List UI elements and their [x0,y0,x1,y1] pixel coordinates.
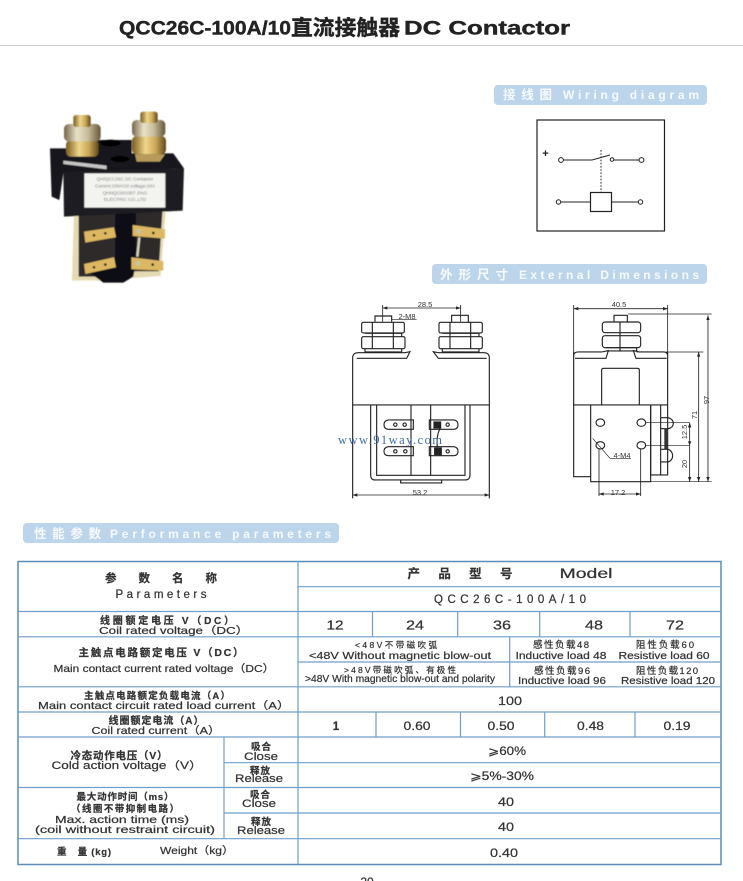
stud [602,315,641,352]
row: main contact current rated voltage [54,639,715,687]
row: main contact circuit rated load current [38,690,522,712]
table grid [18,561,721,864]
row: main contact current rated voltage: 阻性负载60 [636,639,694,651]
row: coil rated current: 1 [333,721,340,733]
title [0,17,743,46]
row: cold action voltage: Release [235,773,283,785]
section badge: performance parameters [23,523,339,543]
body [353,352,489,405]
row: cold action voltage: Cold action voltage（V） [52,759,202,772]
front view dimension labels: 28.5 [418,300,432,309]
housing front [63,168,184,217]
side view dimension labels: 97 [702,396,711,404]
title: DC Contactor [404,18,571,40]
front view dimension labels [398,300,432,497]
dimension lines [574,305,668,352]
label plate: Current:100A/10 voltage:24V [95,184,156,189]
row: coil rated current: 线圈额定电流（A） [108,714,204,727]
terminals [384,420,458,456]
row: coil rated voltage: Coil rated voltage（DC） [99,625,249,637]
header: model [408,565,612,606]
header: parameters: Parameters [116,589,207,601]
plus sign: + [542,148,549,160]
row: main contact current rated voltage: 主触点电路额定电压 V（DC） [78,646,244,659]
left flap and housing top [50,140,184,200]
row: main contact current rated voltage: <48V不带磁吹弧 [355,640,437,650]
front view dimension labels: 2-M8 [398,312,416,321]
row: cold action voltage [52,741,534,785]
row: main contact current rated voltage: >48V带磁吹弧、有极性 [344,665,456,675]
section badge: performance parameters: 性能参数 [34,526,101,541]
row: max action time: 吸合 [250,789,270,801]
row: coil rated voltage: 线圈额定电压 V（DC） [100,614,234,627]
row: main contact current rated voltage: 感性负载96 [534,665,590,677]
section badge: wiring diagram: Wiring diagram [563,88,699,102]
row: main contact current rated voltage: Resistive load 120 [621,676,715,687]
label plate: QH/QCC26C DC Contactor [97,176,154,181]
right stud [439,315,482,352]
header: model: QCC26C-100A/10 [434,594,586,606]
row: main contact current rated voltage: 感性负载48 [533,639,589,651]
section badge: external dimensions [432,264,707,284]
row: coil rated voltage: 36 [493,618,511,632]
title: QCC26C-100A/10 [119,18,291,40]
performance parameters table [18,561,721,864]
row: coil rated voltage: 72 [666,618,684,632]
side view dimension labels: 71 [690,411,699,419]
row: max action time: (coil without restraint circuit) [35,824,215,836]
row: coil rated current: Coil rated current（A） [92,725,220,737]
housing [574,352,668,477]
left stud [362,316,405,352]
mounting holes [596,419,646,449]
title: 直流接触器 [291,17,400,40]
row: coil rated voltage: 48 [585,618,603,632]
row: coil rated current: 0.48 [577,721,604,733]
row: coil rated current: 0.50 [488,721,514,733]
row: main contact current rated voltage: 阻性负载120 [636,665,698,677]
row: main contact circuit rated load current: 100 [498,696,522,708]
section badge: wiring diagram: 接线图 [503,87,552,102]
side view dimension labels: 20 [680,460,689,468]
side view dimension labels: 12.5 [680,425,689,439]
mount plate [591,405,651,482]
lower frame [353,405,489,498]
section badge: performance parameters: Performance parameters [110,527,331,541]
label plate [84,173,165,208]
row: cold action voltage: Close [244,751,278,763]
side view dimension labels [611,300,711,497]
row: cold action voltage: 吸合 [251,741,271,753]
row: coil rated current [92,714,690,737]
header: parameters: 参 数 名 称 [105,571,218,585]
row: max action time: Max. action time (ms) [55,814,189,826]
dimension lines [353,305,489,495]
dimension drawing: front view [353,305,489,498]
product photo: contactor [50,112,184,283]
row: main contact current rated voltage: Inductive load 48 [516,651,607,662]
header: model: 产 品 型 号 [408,566,512,581]
row: cold action voltage: ⩾5%-30% [470,771,534,783]
label plate: ELECTRIC CO.,LTD [104,197,147,202]
row: max action time: 40 [498,797,514,809]
row: max action time: （线圈不带抑制电路） [71,803,179,815]
row: coil rated current: 0.19 [664,721,690,733]
row: max action time: 释放 [251,816,271,828]
row: max action time: 最大动作时间（ms） [76,791,174,803]
section badge: wiring diagram [494,85,707,105]
row: coil rated voltage: 24 [406,618,424,632]
row: main contact current rated voltage: Resistive load 60 [618,651,710,662]
row: main contact current rated voltage: <48V Without magnetic blow-out [309,650,491,662]
section badge: external dimensions: External Dimensions [519,268,699,282]
row: weight: 0.40 [490,848,518,860]
spade terminals [84,225,165,274]
row: weight: Weight（kg） [160,845,234,857]
front view dimension labels: 53.2 [413,488,427,497]
wiring diagram [537,120,664,231]
coil [556,192,643,212]
side view dimension labels: 40.5 [612,300,626,309]
right terminal stud [132,112,166,162]
row: max action time: Close [242,798,276,810]
row: main contact current rated voltage: Inductive load 96 [518,676,606,687]
row: coil rated current: 0.60 [404,721,430,733]
lower frame [72,208,166,281]
row: main contact circuit rated load current: Main contact circuit rated load current（A） [38,700,290,712]
header: model: Model [560,565,612,581]
dimension drawing: side view [574,305,712,496]
row: main contact current rated voltage: Main contact current rated voltage（DC） [54,663,274,675]
watermark: www.91way.com [338,433,442,447]
section badge: external dimensions: 外形尺寸 [440,267,508,282]
row: cold action voltage: 释放 [250,765,270,777]
row: coil rated voltage [99,614,684,637]
label plate: QHNQC001007 2%G [103,190,148,195]
row: main contact current rated voltage: >48V With magnetic blow-out and polarity [305,674,495,685]
row: main contact circuit rated load current: 主触点电路额定负载电流（A） [84,690,230,702]
row: coil rated voltage: 12 [326,618,344,632]
side view dimension labels: 17.2 [611,488,625,497]
main contact [559,155,644,162]
row: cold action voltage: ⩾60% [488,746,526,758]
row: cold action voltage: 冷态动作电压（V） [70,749,168,762]
side view dimension labels: 4-M4 [613,451,631,460]
row: max action time [35,789,514,837]
row: max action time: 40 [498,822,514,834]
left terminal stud [64,115,101,157]
row: weight [57,845,518,860]
row: weight: 重 量 (kg) [57,846,111,858]
row: max action time: Release [237,825,285,837]
header: parameters [105,571,218,601]
